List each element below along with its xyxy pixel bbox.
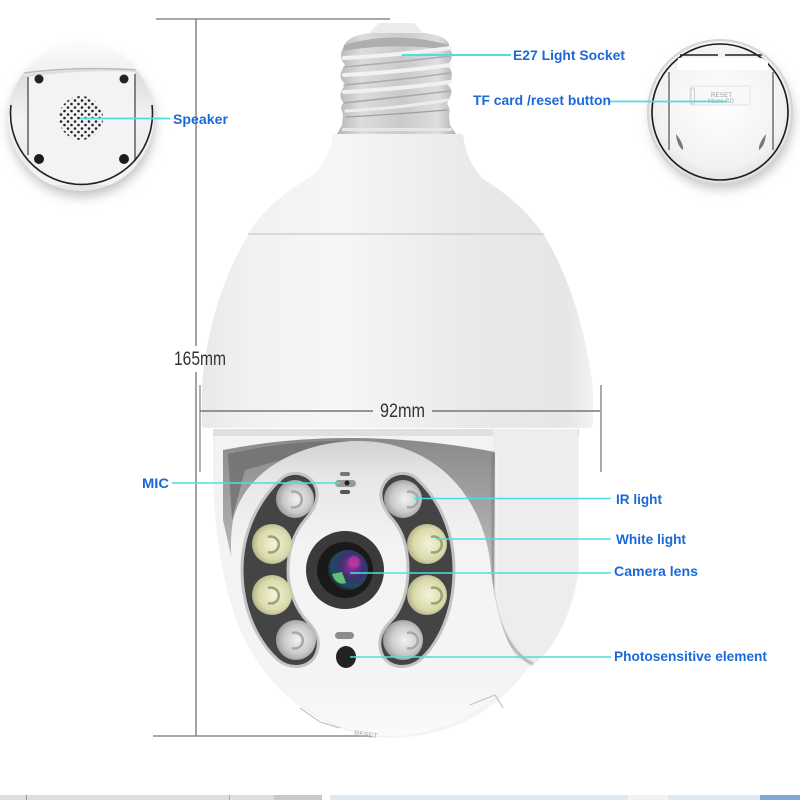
camera lens — [306, 531, 384, 609]
inset: TF card and reset button: RESET — [711, 93, 732, 99]
inset: TF card and reset button: Micro SD — [708, 99, 735, 105]
callout: MIC: MIC — [142, 475, 169, 491]
bottom strip: cropped next image — [0, 795, 800, 800]
IR light — [276, 620, 316, 660]
E27 light socket — [337, 23, 456, 134]
microphone holes — [335, 472, 356, 494]
callout: E27 Light Socket: E27 Light Socket — [513, 47, 625, 63]
callout: Camera lens: Camera lens — [614, 563, 698, 579]
camera lower housing and head: RESET — [354, 730, 379, 740]
dimension: height lines — [153, 19, 390, 736]
dimension: width 92mm: 92mm — [380, 401, 425, 422]
IR light — [383, 620, 423, 660]
left LED panel — [242, 473, 318, 666]
white light — [252, 575, 292, 615]
callout: White light: White light — [616, 531, 686, 547]
camera body: dome and lower band — [202, 134, 593, 428]
dimension label: 165mm: 165mm — [174, 349, 226, 370]
white light — [252, 524, 292, 564]
inset: speaker — [8, 40, 155, 196]
right LED panel — [380, 473, 454, 666]
white light — [407, 524, 447, 564]
callout: TF card /reset button: TF card /reset button — [473, 92, 611, 108]
photosensitive element — [335, 632, 356, 668]
recess behind the lens head — [223, 438, 520, 660]
IR light — [276, 480, 314, 518]
camera lower housing and head — [213, 429, 579, 740]
right wing of housing — [493, 429, 578, 663]
callout: Speaker: Speaker — [173, 111, 229, 127]
callout: Photosensitive element: Photosensitive element — [614, 648, 767, 664]
white light — [407, 575, 447, 615]
IR light — [384, 480, 422, 518]
callout: IR light: IR light — [616, 491, 662, 507]
lens head disc — [231, 441, 522, 736]
inset: TF card and reset button — [648, 40, 792, 188]
